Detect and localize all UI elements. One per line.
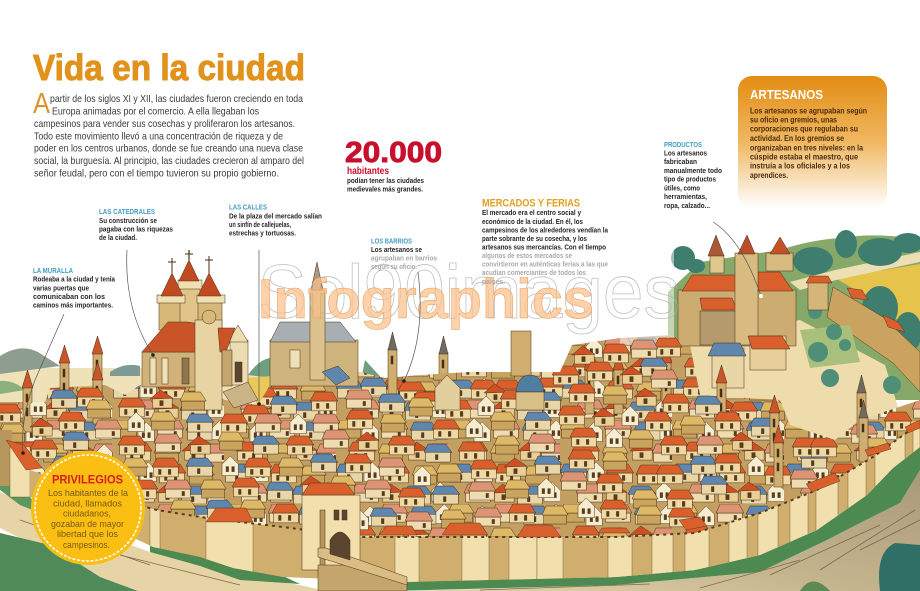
castle on the hill (678, 235, 832, 388)
steeples (22, 332, 727, 432)
panel body text: aprendices. (750, 170, 788, 180)
illustration: medieval walled city (0, 230, 920, 591)
city mass (0, 335, 920, 545)
badge text: Los habitantes de la (48, 488, 129, 498)
badge text (48, 488, 129, 550)
callout: productos: ropa, calzado... (664, 201, 710, 210)
callout: productos: tipo de productos (664, 174, 716, 184)
callout: la muralla (33, 268, 116, 310)
callout: los barrios (371, 238, 437, 271)
city wall (0, 420, 920, 591)
panel body text: cúspide estaba el maestro, que (750, 152, 858, 162)
callout: productos: Los artesanos (664, 148, 707, 158)
stat: 20.000 habitantes: podían tener las ciudades (347, 176, 424, 185)
right landscape with hills and fields (668, 230, 920, 400)
callout: las catedrales: pagaba con las riquezas (99, 224, 173, 234)
panel body text: actividad. En los gremios se (750, 133, 844, 143)
callout: las calles: un sinfín de callejuelas, (229, 220, 291, 229)
text block: mercados y ferias (482, 198, 609, 286)
callout: productos: útiles, como (664, 184, 701, 192)
intro paragraph: señor feudal, pero con el tiempo tuvieron su propio gobierno. (34, 168, 279, 180)
callout: las calles: LAS CALLES (229, 204, 267, 212)
panel body text: corporaciones que regulaban su (750, 124, 858, 134)
cathedral (142, 250, 258, 410)
castle plaza (672, 320, 905, 445)
callout: la muralla: Rodeaba a la ciudad y tenía (33, 274, 116, 284)
drop cap: A (33, 88, 51, 120)
callout: los barrios: agrupaban en barrios (371, 254, 437, 262)
callout: productos: PRODUCTOS (664, 142, 702, 149)
callout: la muralla: caminos más importantes. (33, 300, 113, 310)
stat: 20.000 habitantes: 20.000 (345, 137, 442, 169)
text block: mercados y ferias: parte sobrante de su cosecha, y los (482, 234, 587, 243)
badge heading: PRIVILEGIOS (52, 472, 123, 486)
callout: los barrios: Los artesanos se (371, 245, 422, 254)
central tower and blue dome (511, 331, 544, 410)
callout: la muralla: LA MURALLA (33, 268, 73, 275)
panel body text: organizaban en tres niveles: en la (750, 142, 863, 152)
badge text: campesinos. (63, 540, 110, 550)
panel body text: su oficio en gremios, unas (750, 114, 837, 124)
riverbank and road (0, 447, 920, 591)
intro paragraph: Todo este movimiento llevó a una concentración de riqueza y de (34, 131, 283, 142)
text block: mercados y ferias: MERCADOS Y FERIAS (482, 198, 580, 210)
back right wall (827, 287, 920, 392)
intro paragraph: partir de los siglos XI y XII, las ciudades fueron creciendo en toda (50, 94, 303, 105)
watermark outline text: Sol90images (258, 250, 680, 335)
inner towers (769, 375, 868, 487)
city houses (0, 338, 912, 530)
watermark filled text: Infographics (258, 267, 594, 330)
text block: mercados y ferias: algunos de estos mercados se (482, 251, 572, 260)
callout: la muralla: varias puertas que (33, 284, 89, 292)
panel body text: Los artesanos se agrupaban según (750, 106, 867, 116)
intro paragraph: social, la burguesía. Al principio, las ciudades crecieron al amparo del (34, 156, 304, 167)
distant hills and fields, left (0, 348, 388, 412)
callout: las calles (229, 204, 322, 238)
badge text: libertad que los (57, 529, 118, 539)
callout: productos: herramientas, (664, 192, 707, 201)
second church (270, 262, 358, 386)
panel heading: ARTESANOS (750, 87, 823, 102)
text block: mercados y ferias: campesinos de los alrededores vendían la (482, 226, 609, 234)
badge text: ciudad, llamados (53, 498, 122, 508)
panel body text (750, 106, 867, 180)
gate tower and bridge (302, 483, 407, 591)
callout: productos: fabricaban (664, 157, 697, 166)
plaza trees and garden (800, 305, 901, 394)
panel: artesanos (738, 76, 887, 208)
title: Vida en la ciudad (33, 47, 305, 88)
text block: mercados y ferias: El mercado era el centro social y (482, 208, 581, 217)
leader lines (21, 222, 763, 455)
callout: productos: manualmente todo (664, 166, 723, 175)
text block: mercados y ferias: países. (482, 277, 505, 286)
intro paragraph: poder en los centros urbanos, donde se fue creando una nueva clase (34, 144, 303, 155)
intro paragraph: campesinos para vender sus cosechas y proliferaron los artesanos. (34, 119, 295, 130)
stat: 20.000 habitantes: medievales más grandes. (347, 184, 423, 194)
callout: las catedrales: Su construcción se (99, 216, 157, 225)
badge: privilegios (31, 451, 145, 565)
text block: mercados y ferias: convirtieron en auténticas ferias a las que (482, 260, 608, 268)
panel body text: instruía a los oficiales y a los (750, 160, 850, 170)
callout: productos (664, 142, 723, 210)
callout: los barrios: LOS BARRIOS (371, 238, 412, 246)
callout: las catedrales (99, 209, 173, 242)
intro paragraph: Europa animadas por el comercio. A ella llegaban los (52, 106, 259, 118)
badge text: ciudadanos, (63, 508, 111, 518)
text block: mercados y ferias: artesanos sus mercancías. Con el tiempo (482, 242, 607, 252)
callout: las calles: estrechas y tortuosas. (229, 228, 296, 238)
stat: 20.000 habitantes (345, 137, 442, 194)
badge text: gozaban de mayor (51, 519, 124, 529)
gabled chapel (435, 375, 460, 410)
callout: los barrios: según su oficio. (371, 262, 417, 271)
callout: las calles: De la plaza del mercado salían (229, 212, 322, 220)
text block: mercados y ferias: acudían comerciantes de todos los (482, 268, 586, 277)
wall tower roofs (6, 420, 920, 537)
faded image edge (620, 240, 674, 345)
text block: mercados y ferias: económico de la ciudad. En él, los (482, 217, 583, 226)
intro paragraph (33, 88, 304, 180)
stat: 20.000 habitantes: habitantes (347, 166, 389, 177)
callout: las catedrales: LAS CATEDRALES (99, 209, 155, 216)
callout: la muralla: comunicaban con los (33, 292, 105, 301)
callout: las catedrales: de la ciudad. (99, 233, 137, 242)
